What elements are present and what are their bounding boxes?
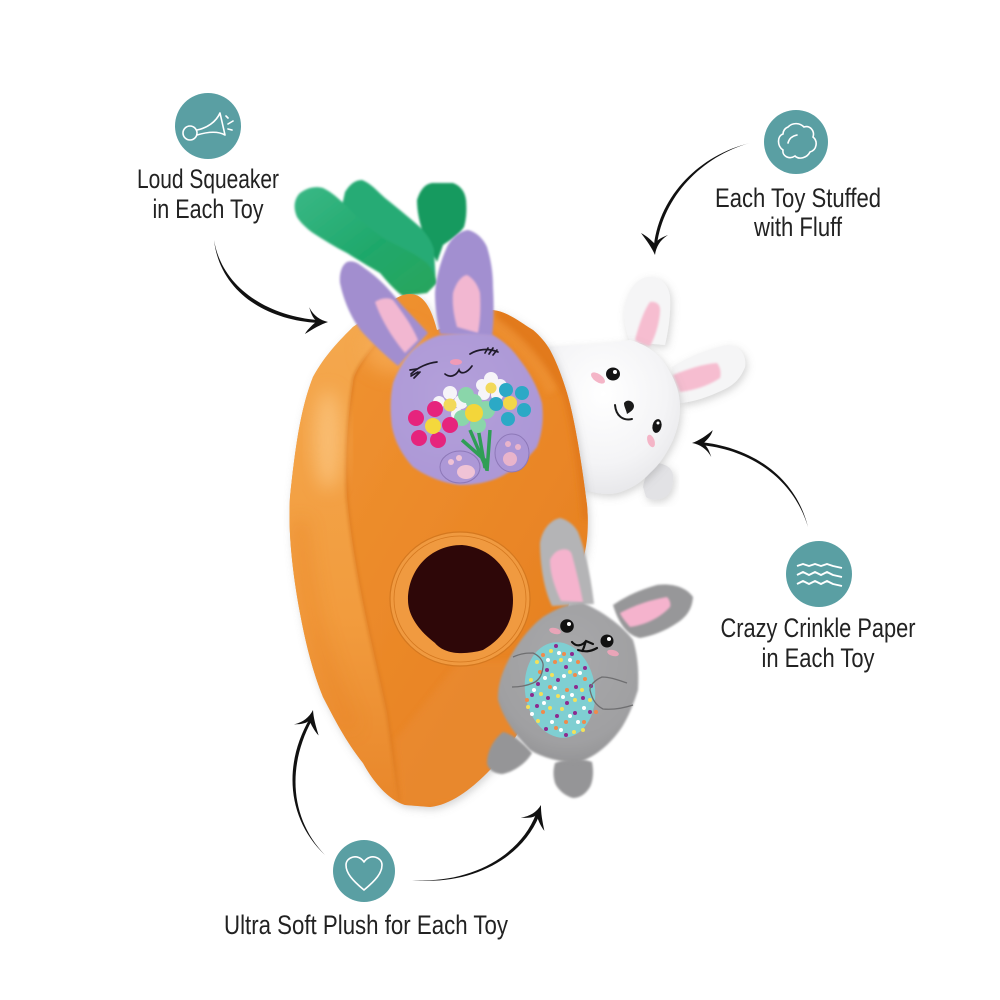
gray bunny feet (487, 732, 593, 798)
gray bunny ears (540, 518, 693, 638)
arrow: crinkle to white bunny (691, 429, 808, 527)
infographic canvas (138, 93, 916, 940)
label: ultra soft plush: Ultra Soft Plush for Each Toy (224, 910, 508, 940)
gray bunny body (498, 603, 638, 763)
white bunny foot (643, 463, 673, 500)
arrow: plush to gray bunny (412, 800, 554, 881)
gray bunny (487, 518, 693, 798)
icon: crinkle waves (786, 541, 852, 607)
white bunny inner ears (635, 302, 721, 392)
heading: crazy crinkle paper: Crazy Crinkle Paper (720, 613, 916, 643)
callout: loud squeaker (137, 93, 279, 224)
carrot body (289, 294, 588, 807)
gray bunny egg with dots (519, 638, 601, 742)
arrow: squeaker to carrot (214, 240, 329, 336)
white bunny ears (624, 277, 745, 403)
purple bunny nose (450, 359, 462, 365)
gray bunny arms (512, 653, 633, 709)
gray bunny inner ears (550, 549, 670, 627)
callout: ultra soft plush (224, 840, 508, 940)
icon: heart (333, 840, 395, 902)
white bunny (540, 277, 745, 500)
carrot plush panels (280, 300, 600, 810)
icon: horn (175, 93, 241, 159)
icon: fluff cloud (764, 110, 828, 174)
carrot hole (390, 532, 530, 666)
white bunny face (589, 368, 663, 448)
subheading: with fluff: with Fluff (753, 212, 842, 242)
arrow: plush to carrot (292, 706, 326, 855)
callout: stuffed with fluff (715, 110, 881, 242)
carrot plush toy (280, 180, 600, 810)
heading: each toy stuffed: Each Toy Stuffed (715, 183, 881, 213)
subheading: in each toy: in Each Toy (762, 643, 875, 673)
purple bunny face (410, 348, 498, 378)
carrot green leaves (295, 180, 466, 296)
white bunny body (540, 340, 680, 494)
gray bunny face (548, 619, 620, 657)
heading: loud squeaker: Loud Squeaker (137, 164, 279, 194)
callout: crinkle paper (720, 541, 916, 673)
purple bunny inner ears (375, 275, 480, 353)
bouquet of flowers (408, 372, 531, 471)
purple bunny ears (340, 230, 494, 366)
purple bunny (340, 230, 543, 485)
purple bunny body (391, 334, 543, 485)
subheading: in each toy: in Each Toy (152, 194, 264, 224)
purple bunny paws (440, 434, 529, 483)
arrow: fluff to white bunny (641, 143, 750, 255)
